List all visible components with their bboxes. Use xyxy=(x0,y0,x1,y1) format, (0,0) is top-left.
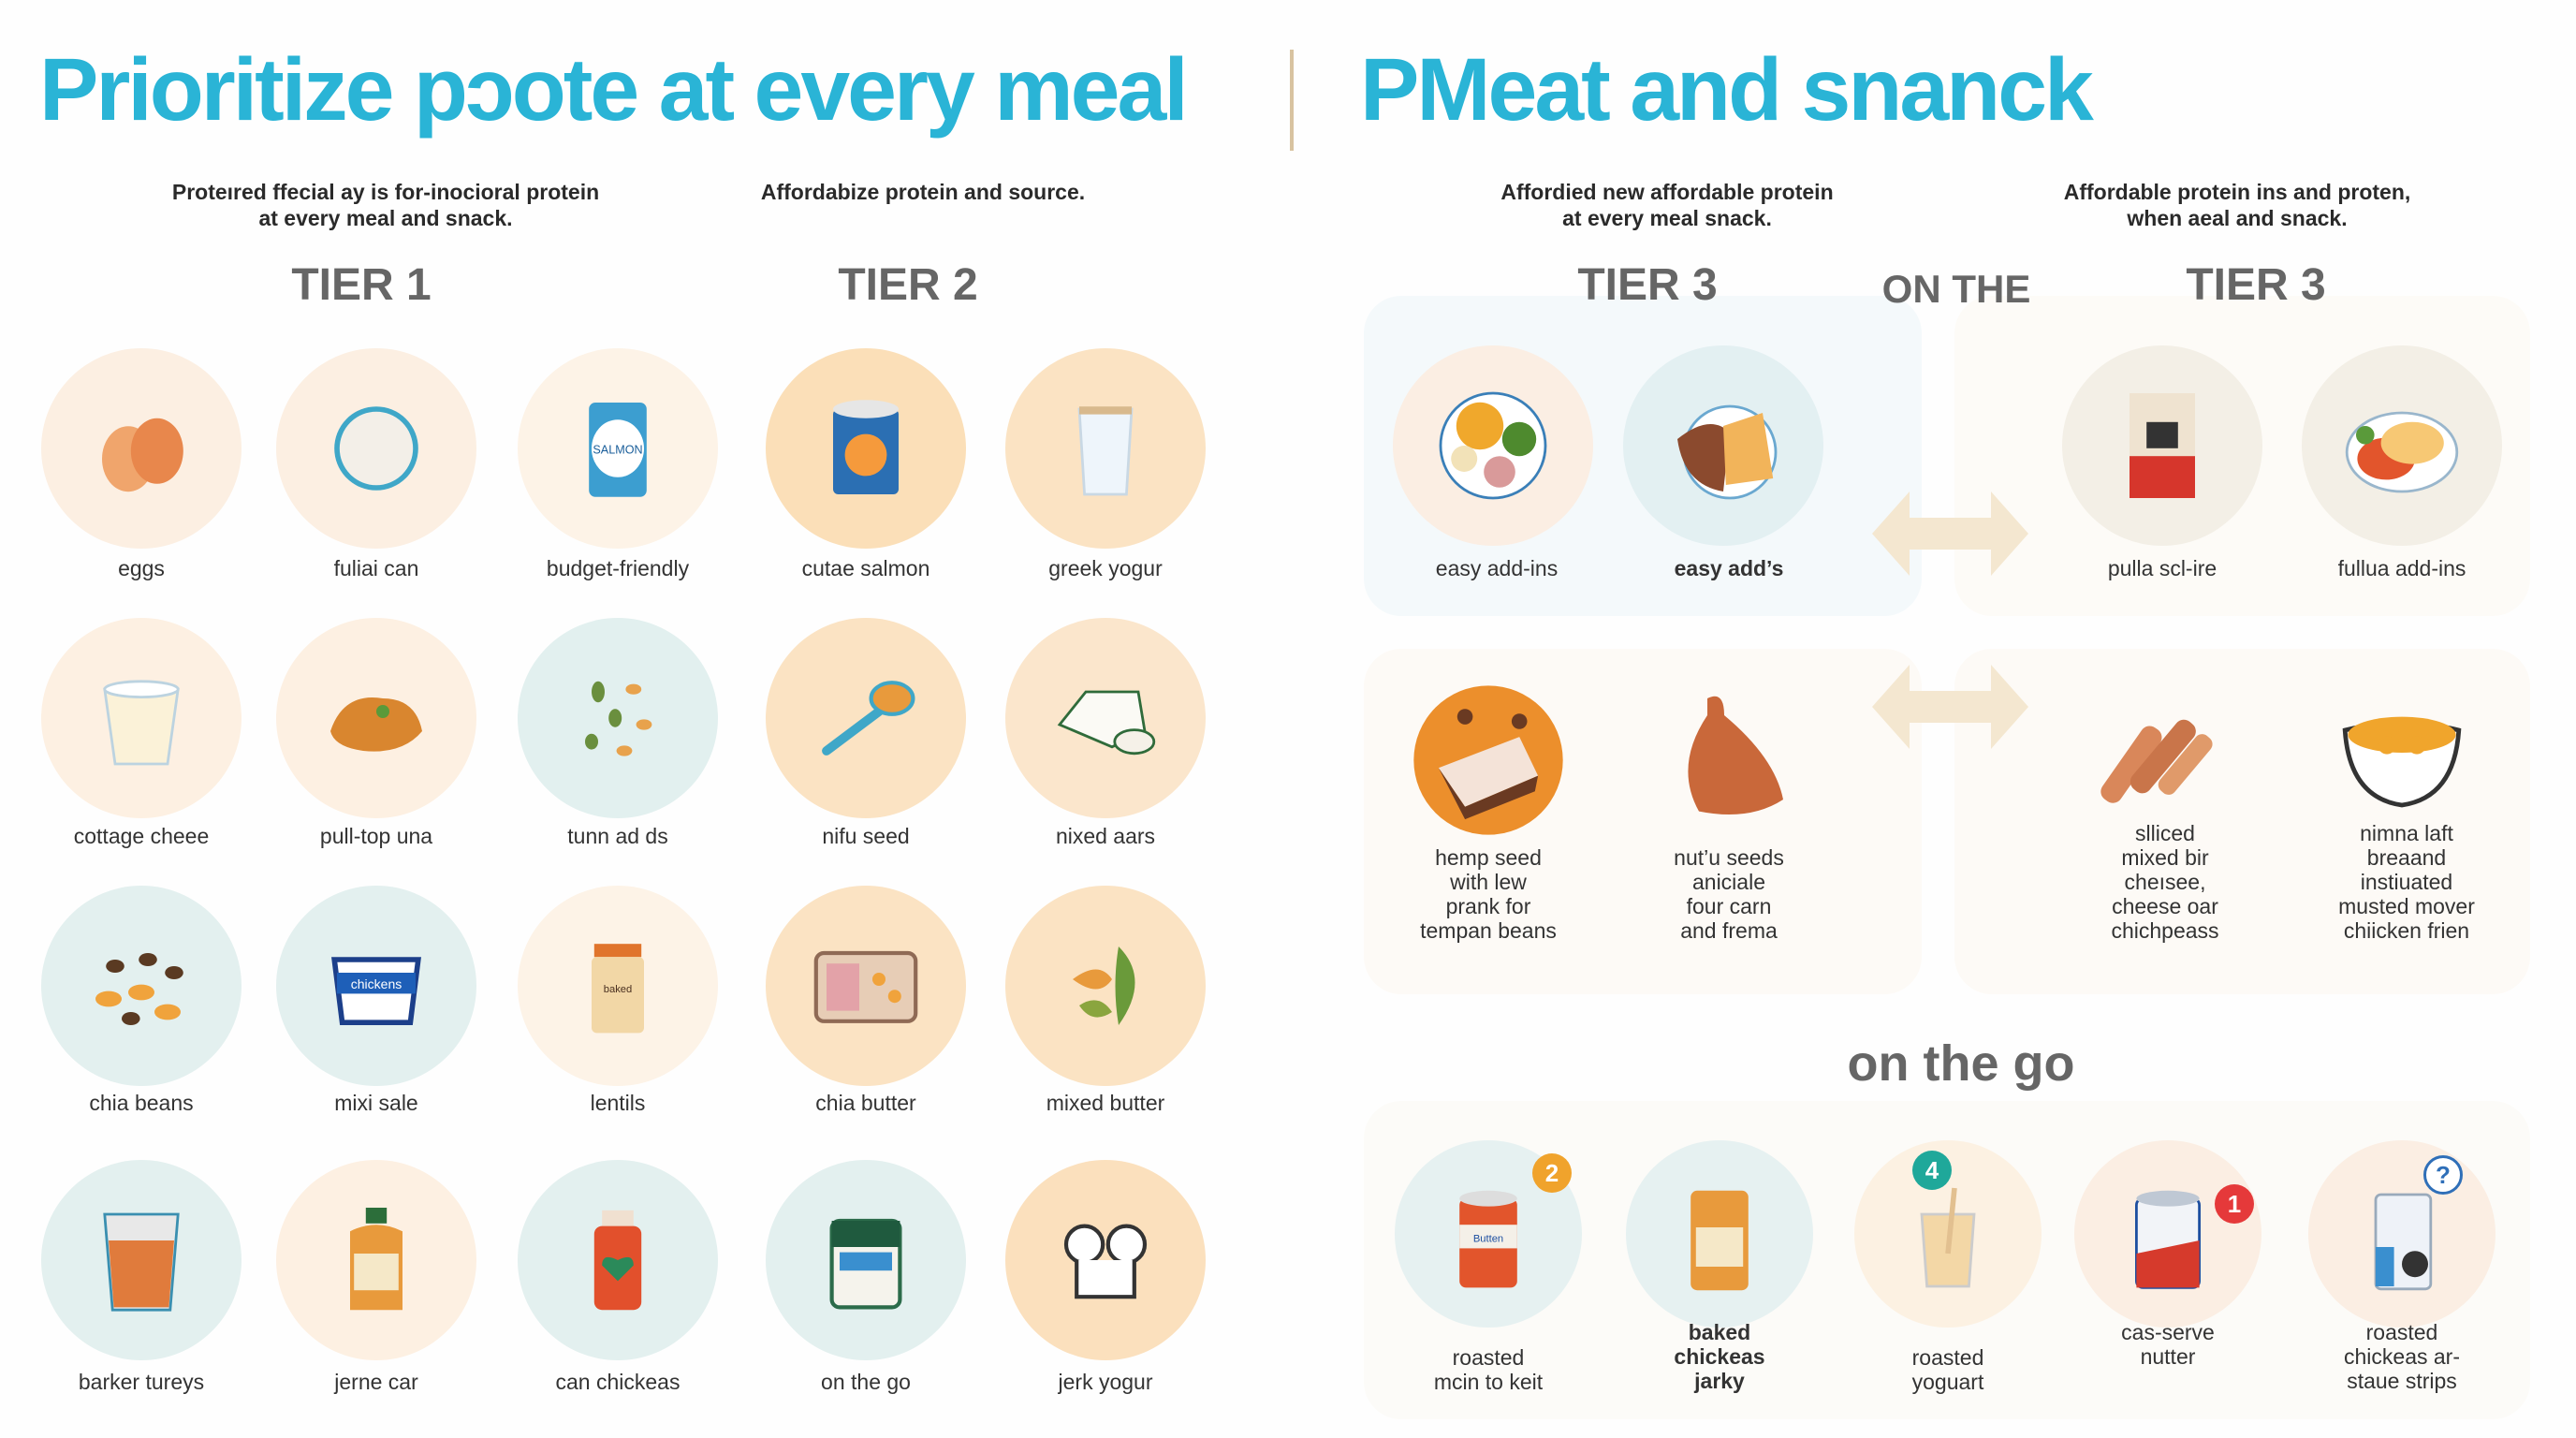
labels: right section: hemp seed xyxy=(1435,845,1542,870)
labels: right section: pulla scl-ire xyxy=(2108,556,2217,580)
labels: right section: chichpeass xyxy=(2111,918,2219,943)
item: greek yogur xyxy=(1005,348,1206,549)
labels: grid: mixed butter xyxy=(1046,1091,1164,1115)
item: mixi sale: chickens xyxy=(351,976,402,991)
labels: right section: slliced xyxy=(2135,821,2195,845)
heading on the: ON THE xyxy=(1882,267,2030,311)
labels: right section: nut’u seeds xyxy=(1674,845,1784,870)
subtitle 2: Affordabize protein and source. xyxy=(761,180,1085,204)
labels: grid xyxy=(74,556,1164,1394)
labels: grid: on the go xyxy=(821,1370,911,1394)
item: chia butter xyxy=(766,886,966,1086)
labels: right section: fullua add-ins xyxy=(2338,556,2466,580)
labels: right section: chickeas xyxy=(1674,1344,1765,1369)
labels: right section: roasted xyxy=(1453,1345,1524,1370)
labels: grid: greek yogur xyxy=(1048,556,1163,580)
item: jerne car xyxy=(276,1160,476,1360)
item: budget-friendly: SALMON xyxy=(593,444,643,457)
item: eggs xyxy=(41,348,242,549)
item: easy add-ins plate xyxy=(1393,345,1593,546)
heading tier 2: TIER 2 xyxy=(838,260,978,310)
labels: grid: cutae salmon xyxy=(802,556,929,580)
item: mixi sale xyxy=(276,886,476,1086)
subtitle 4: Affordable protein ins and proten, xyxy=(2064,180,2410,204)
labels: grid: nifu seed xyxy=(822,824,910,848)
badge ?: ? xyxy=(2436,1161,2451,1189)
item: nimna bowl xyxy=(2342,717,2462,807)
item: pulla scl-ire xyxy=(2062,345,2262,546)
labels: right section: aniciale xyxy=(1692,870,1765,894)
labels: grid: mixi sale xyxy=(334,1091,418,1115)
badge 2: 2 xyxy=(1545,1159,1559,1187)
labels: right section: roasted xyxy=(1912,1345,1983,1370)
labels: grid: budget-friendly xyxy=(547,556,689,580)
labels: right section: jarky xyxy=(1694,1369,1745,1393)
labels: right section: cheese oar xyxy=(2112,894,2218,918)
panel: right top right xyxy=(1954,296,2530,616)
labels: grid: pull-top una xyxy=(320,824,432,848)
labels: grid: jerne car xyxy=(334,1370,418,1394)
labels: grid: chia beans xyxy=(89,1091,194,1115)
labels: grid: jerk yogur xyxy=(1059,1370,1152,1394)
labels: right section: musted mover xyxy=(2338,894,2475,918)
subtitle 4 xyxy=(2064,180,2410,230)
labels: right section: mixed bir xyxy=(2121,845,2209,870)
labels: right section: yoguart xyxy=(1912,1370,1983,1394)
right section items xyxy=(1393,345,2502,1328)
labels: right section: prank for xyxy=(1446,894,1530,918)
labels: grid: tunn ad ds xyxy=(567,824,668,848)
item: fullua add-ins xyxy=(2302,345,2502,546)
subtitle 1: at every meal and snack. xyxy=(258,206,513,230)
labels: right section: easy add’s xyxy=(1675,556,1783,580)
subtitle 1 xyxy=(172,180,599,230)
badge 4 xyxy=(1912,1151,1952,1190)
item: roasted mcin xyxy=(1395,1140,1582,1328)
item: easy add's xyxy=(1623,345,1823,546)
item: nifu seed xyxy=(766,618,966,818)
labels: grid: barker tureys xyxy=(79,1370,204,1394)
labels: right section: instiuated xyxy=(2361,870,2452,894)
labels: right section: breaand xyxy=(2367,845,2446,870)
subtitle 3: Affordied new affordable protein xyxy=(1500,180,1834,204)
arrow: bottom double xyxy=(1872,665,2028,749)
subtitle 3: at every meal snack. xyxy=(1562,206,1772,230)
labels: grid: nixed aars xyxy=(1056,824,1155,848)
heading tier 3: TIER 3 xyxy=(1577,260,1718,310)
badge 1 xyxy=(2215,1184,2254,1224)
item: fuliai can xyxy=(276,348,476,549)
labels: right section: chickeas ar- xyxy=(2344,1344,2460,1369)
item: cutae salmon xyxy=(766,348,966,549)
labels: right section: four carn xyxy=(1687,894,1771,918)
item: on the go xyxy=(766,1160,966,1360)
labels: right section: and frema xyxy=(1680,918,1778,943)
heading: on the go: on the go xyxy=(1848,1035,2074,1092)
item: budget-friendly xyxy=(518,348,718,549)
subtitle 4: when aeal and snack. xyxy=(2127,206,2348,230)
panel: on the go xyxy=(1364,1101,2530,1419)
labels: right section: mcin to keit xyxy=(1434,1370,1543,1394)
labels: grid: cottage cheee xyxy=(74,824,209,848)
item: roasted yoguart xyxy=(1854,1140,2042,1328)
divider xyxy=(1290,50,1294,151)
arrow: top double xyxy=(1872,492,2028,576)
item: hemp seed xyxy=(1413,685,1563,835)
labels: right section: tempan beans xyxy=(1420,918,1557,943)
item: cottage cheee xyxy=(41,618,242,818)
item: tunn ad ds xyxy=(518,618,718,818)
subtitle 1: Proteıred ffecial ay is for-inocioral protein xyxy=(172,180,599,204)
item: can chickeas xyxy=(518,1160,718,1360)
panel: right top left xyxy=(1364,296,1922,616)
labels: right section: roasted xyxy=(2366,1320,2437,1344)
labels: grid: lentils xyxy=(591,1091,645,1115)
item: lentils: baked xyxy=(604,984,632,995)
item: barker tureys xyxy=(41,1160,242,1360)
item: nixed aars xyxy=(1005,618,1206,818)
badge 1: 1 xyxy=(2228,1190,2241,1218)
labels: right section: nutter xyxy=(2141,1344,2195,1369)
item: pull-top una xyxy=(276,618,476,818)
labels: right section: nimna laft xyxy=(2360,821,2453,845)
item: mixed butter xyxy=(1005,886,1206,1086)
labels: right section: staue strips xyxy=(2347,1369,2457,1393)
item: roasted chickeas strips xyxy=(2299,1140,2505,1384)
labels: grid: fuliai can xyxy=(334,556,418,580)
labels: right section: easy add-ins xyxy=(1436,556,1558,580)
panel: right bottom left xyxy=(1364,649,1922,994)
labels: grid: eggs xyxy=(118,556,165,580)
subtitle 3 xyxy=(1500,180,1834,230)
labels: right section: baked xyxy=(1689,1320,1750,1344)
labels: grid: chia butter xyxy=(815,1091,916,1115)
item: jerk yogur xyxy=(1005,1160,1206,1360)
heading tier 1: TIER 1 xyxy=(291,260,432,310)
item: nut'u seeds chicken xyxy=(1688,697,1783,814)
labels: right section xyxy=(1310,0,2576,1438)
title right: PMeat and snanck xyxy=(1360,40,2091,139)
labels: right section: with lew xyxy=(1450,870,1527,894)
labels: right section: chiicken frien xyxy=(2344,918,2469,943)
grid: tier 1 and 2 items xyxy=(41,348,1206,1394)
labels: right section: cheısee, xyxy=(2125,870,2205,894)
badge 2 xyxy=(1532,1153,1572,1193)
item: lentils xyxy=(518,886,718,1086)
title left: Prioritize pɔote at every meal xyxy=(39,40,1186,139)
badge ? xyxy=(2423,1155,2463,1195)
badge 4: 4 xyxy=(1925,1156,1939,1184)
item: cas-serve nutter xyxy=(2074,1140,2261,1328)
panel: right bottom right xyxy=(1954,649,2530,994)
labels: right section: cas-serve xyxy=(2121,1320,2215,1344)
item: roasted mcin: Butten xyxy=(1473,1233,1503,1244)
item: baked chickeas jarky xyxy=(1626,1140,1813,1328)
item: chia beans xyxy=(41,886,242,1086)
labels: grid: can chickeas xyxy=(556,1370,680,1394)
heading tier 3 right: TIER 3 xyxy=(2186,260,2326,310)
item: sliced xyxy=(2100,719,2213,803)
